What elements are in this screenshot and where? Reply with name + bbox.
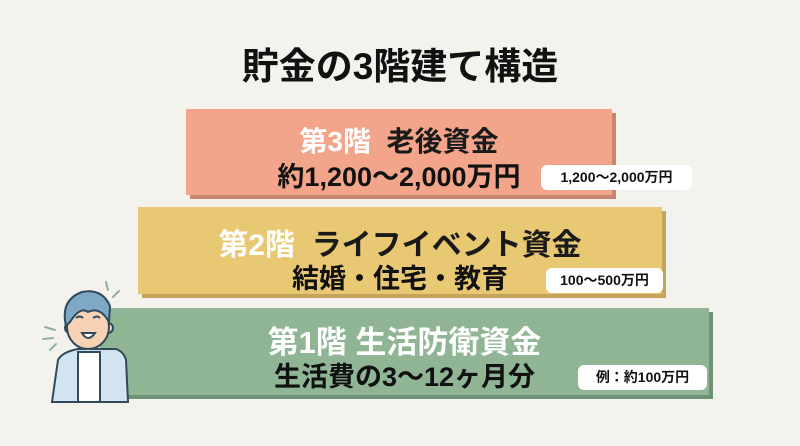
panel: floor 1: 生活費の3〜12ヶ月分 [274,362,535,392]
tag: floor 2 amount [546,268,663,293]
panel: floor 3: 第3階 老後資金 [299,126,499,157]
panel: floor 2: 結婚・住宅・教育 [292,264,508,294]
panel: floor 1: 第1階 生活防衛資金 [268,325,541,360]
panel: floor 3 [186,109,612,195]
panel: floor 3: 約1,200〜2,000万円 [277,162,521,192]
panel: floor 2: 第2階 ライフイベント資金 [218,229,582,262]
tag: floor 2 amount: 100〜500万円 [560,272,649,288]
title: 貯金の3階建て構造 [242,46,558,87]
tag: floor 1 amount: 例：約100万円 [596,369,689,385]
tag: floor 1 amount [578,365,707,390]
icon: smiling person [42,281,130,403]
tag: floor 3 amount: 1,200〜2,000万円 [560,169,673,185]
tag: floor 3 amount [541,165,692,190]
panel: floor 2 [138,207,662,294]
panel: floor 1 [100,308,709,395]
